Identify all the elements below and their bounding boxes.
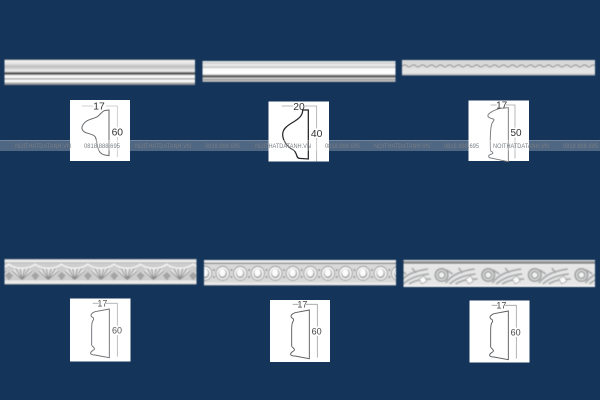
watermark band: 0818.888.695 bbox=[84, 143, 120, 150]
profile card 1: 17 x 60: 60 bbox=[112, 128, 123, 139]
profile card 1: 17 x 60 bbox=[70, 100, 130, 161]
profile card 2: 20 x 40: 40 bbox=[311, 129, 323, 140]
profile card 4: 17 x 60: 60 bbox=[112, 326, 122, 336]
watermark band: NOITHATDATANH.VN bbox=[135, 143, 191, 150]
profile card 5: 17 x 60: 60 bbox=[312, 327, 322, 337]
profile card 2: 20 x 40: 20 bbox=[293, 102, 305, 113]
watermark band bbox=[0, 140, 600, 151]
moulding strip 4: fan ornament bbox=[4, 259, 196, 284]
watermark band: NOITHATDATANH.VN bbox=[255, 143, 311, 150]
watermark band: NOITHATDATANH.VN bbox=[493, 143, 549, 150]
profile card 3: 17 x 50: 50 bbox=[510, 128, 522, 139]
profile card 3: 17 x 50 bbox=[468, 100, 529, 162]
watermark band: NOITHATDATANH.VN bbox=[374, 143, 430, 150]
watermark band: 0818.888.695 bbox=[444, 143, 479, 150]
moulding strip 3 bbox=[402, 60, 595, 76]
profile card 5: 17 x 60 bbox=[270, 300, 330, 362]
moulding strip 2 bbox=[202, 61, 396, 82]
profile card 2: 20 x 40 bbox=[268, 102, 329, 162]
profile card 3: 17 x 50: 17 bbox=[496, 101, 508, 112]
profile card 4: 17 x 60 bbox=[70, 298, 130, 362]
moulding strip 6: rose ornament bbox=[404, 260, 595, 287]
watermark band: 0818.888.695 bbox=[205, 143, 240, 150]
moulding strip 1 bbox=[4, 60, 195, 85]
profile card 1: 17 x 60: 17 bbox=[93, 101, 105, 112]
watermark band: 0818.888.695 bbox=[325, 143, 360, 150]
profile card 5: 17 x 60: 17 bbox=[297, 300, 307, 310]
watermark band: NOITHATDATANH.VN bbox=[15, 143, 71, 150]
profile card 4: 17 x 60: 17 bbox=[97, 299, 107, 309]
profile card 6: 17 x 60: 60 bbox=[511, 328, 521, 338]
moulding strip 5: egg ornament bbox=[204, 260, 396, 286]
profile card 6: 17 x 60: 17 bbox=[496, 301, 506, 311]
profile card 6: 17 x 60 bbox=[470, 300, 530, 362]
